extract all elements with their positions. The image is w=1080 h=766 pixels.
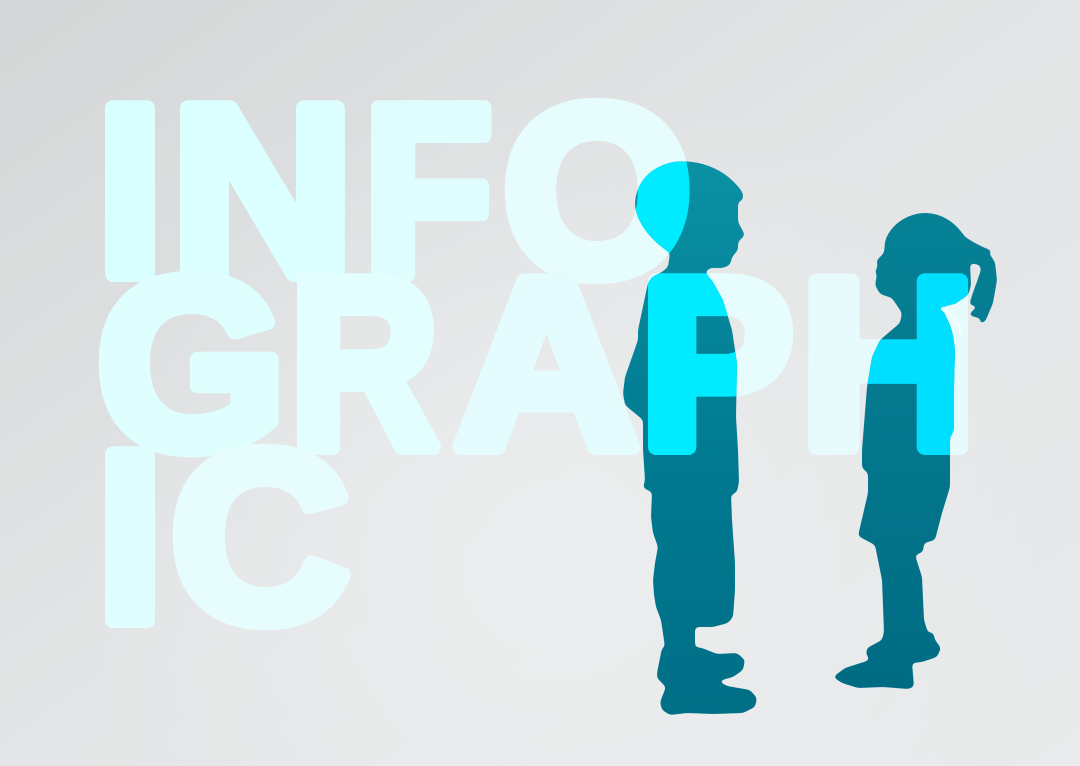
title line: INFO <box>97 55 692 326</box>
title line: IC: I <box>97 401 163 671</box>
title overlap on boy: cyan letters O and P: P <box>640 229 793 498</box>
title line: GRAPH: P <box>640 229 793 498</box>
silhouette: girl <box>833 213 997 689</box>
title line: INFO: O <box>503 57 692 326</box>
title line: GRAPH: G <box>97 230 286 499</box>
title line: INFO: F <box>364 55 492 325</box>
title line: INFO: I <box>97 55 163 325</box>
title line: INFO: N <box>172 57 354 326</box>
title line: GRAPH: A <box>454 229 639 498</box>
title line: GRAPH: R <box>290 230 438 499</box>
title overlap on girl: cyan letter H: H <box>800 230 976 499</box>
hair strand highlight on girl <box>943 309 961 332</box>
title overlap on boy: cyan letters O and P: O <box>503 57 692 326</box>
title line: IC: C <box>171 402 349 671</box>
title: INFOGRAPHIC pale letters <box>97 55 976 671</box>
title line: GRAPH: H <box>800 230 976 499</box>
silhouette: boy <box>623 161 757 715</box>
title overlap on boy: cyan letters O and P <box>636 161 737 455</box>
title line: GRAPH <box>97 229 976 499</box>
